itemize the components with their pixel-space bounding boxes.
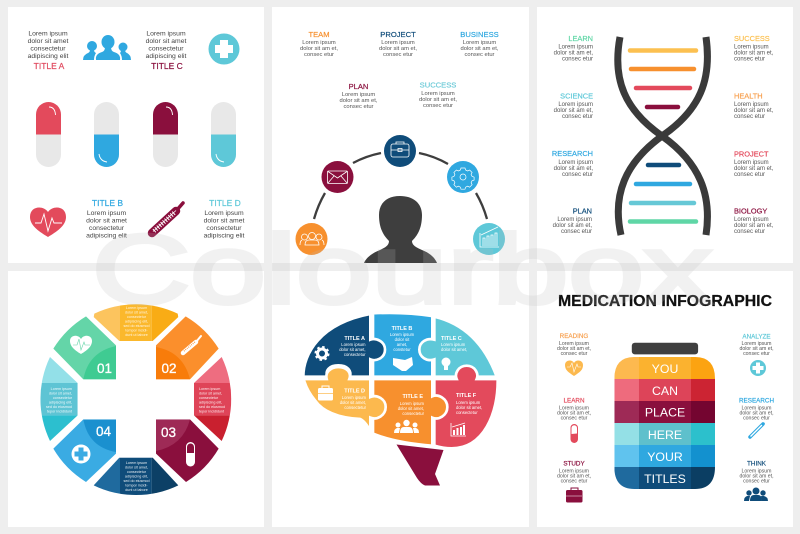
text block: biology: dolor sit am et, bbox=[734, 223, 774, 229]
label: title E: dolor sit amet, bbox=[398, 406, 424, 411]
ring text: yellow bbox=[123, 306, 150, 337]
text block: science: SCIENCE bbox=[560, 92, 593, 100]
text block: study: Lorem ipsum bbox=[559, 468, 589, 474]
brain pieces bbox=[303, 313, 498, 448]
text block: title B: TITLE B bbox=[92, 198, 123, 208]
jar bands bbox=[614, 357, 715, 489]
panel: pills bbox=[8, 7, 264, 263]
text block: plan: dolor sit am et, bbox=[553, 223, 592, 229]
text block: success: dolor sit am et, bbox=[734, 50, 774, 56]
brain stem bbox=[396, 444, 444, 486]
text block: title B: Lorem ipsum bbox=[87, 210, 126, 217]
icon: people blue bbox=[744, 488, 768, 501]
icon: chart circle bbox=[473, 223, 505, 255]
text block: think: consec etur bbox=[743, 478, 770, 484]
text block: research: RESEARCH bbox=[739, 398, 774, 404]
icon: heart bbox=[30, 208, 66, 237]
label: title A: dolor sit amet, bbox=[339, 347, 366, 352]
text block: research: Lorem ipsum bbox=[558, 160, 593, 166]
text block: business: BUSINESS bbox=[460, 30, 499, 39]
text block: title C: consectetur bbox=[148, 46, 184, 52]
text block: science: consec etur bbox=[562, 114, 593, 120]
text block: think: dolor sit am et, bbox=[739, 474, 774, 480]
text block: research: consec etur bbox=[743, 415, 770, 421]
ring text: dark blue: dolor sit amet, bbox=[125, 466, 148, 470]
text block: research: consec etur bbox=[562, 172, 593, 178]
text block: learn: consec etur bbox=[562, 56, 593, 62]
ring text: teal: sed do eiusmod bbox=[46, 405, 72, 409]
text block: biology: consec etur bbox=[734, 229, 765, 235]
text block: reading bbox=[557, 333, 591, 357]
icon: heart orange bbox=[565, 361, 583, 376]
text block: health: consec etur bbox=[734, 114, 765, 120]
text block: business: consec etur bbox=[465, 52, 495, 58]
text block: project: Lorem ipsum bbox=[381, 40, 415, 46]
text block: project bbox=[734, 150, 774, 178]
ring text: yellow: Lorem ipsum bbox=[126, 306, 147, 310]
number 03: 03 bbox=[161, 425, 176, 440]
text block: title C: dolor sit amet bbox=[146, 38, 187, 45]
text block: success bbox=[734, 34, 774, 62]
text block: project: dolor sit am et, bbox=[379, 46, 417, 52]
text block: success: SUCCESS bbox=[420, 80, 456, 90]
text block: project bbox=[379, 30, 417, 58]
piece C bbox=[419, 317, 497, 377]
ring text: teal: dolor sit amet, bbox=[49, 392, 72, 396]
piece A bbox=[303, 314, 385, 377]
text block: plan: dolor sit am et, bbox=[339, 98, 378, 104]
label: title D: TITLE D bbox=[344, 388, 365, 394]
DNA rungs bbox=[630, 50, 696, 222]
text block: team: TEAM bbox=[308, 30, 330, 39]
text block: learn bbox=[554, 34, 593, 62]
label: title B: TITLE B bbox=[392, 326, 412, 332]
text block: project: consec etur bbox=[734, 172, 765, 178]
label: title B: amet, bbox=[397, 342, 407, 347]
icon: briefcase maroon bbox=[566, 488, 582, 502]
ring text: yellow: consectetur bbox=[127, 315, 147, 319]
label: title A bbox=[339, 336, 366, 357]
segment: 01 green bbox=[54, 316, 116, 380]
ring text: dark blue: dunt ut labore bbox=[125, 488, 148, 492]
text block: project: Lorem ipsum bbox=[734, 160, 769, 166]
ring text: teal: Lorem ipsum bbox=[51, 387, 72, 391]
piece D bbox=[304, 367, 386, 431]
text block: title B: consectetur bbox=[89, 225, 125, 232]
ring text: red: adipiscing elit, bbox=[199, 400, 222, 404]
text block: biology bbox=[734, 206, 774, 235]
text block: plan bbox=[553, 206, 592, 235]
icon: mail circle bbox=[322, 161, 354, 193]
ring text: dark blue bbox=[123, 461, 150, 492]
text block: learn: LEARN bbox=[568, 34, 593, 43]
text block: health: dolor sit am et, bbox=[734, 108, 774, 114]
label: title E: TITLE E bbox=[403, 394, 423, 400]
text block: title D: Lorem ipsum bbox=[204, 210, 244, 217]
icon: people bbox=[83, 35, 131, 60]
text block: project: consec etur bbox=[383, 52, 413, 58]
panel: medication jar bbox=[537, 271, 793, 527]
jar labels: HERE bbox=[648, 428, 682, 442]
text block: study: consec etur bbox=[561, 478, 588, 484]
jar bbox=[614, 343, 715, 489]
jar labels: YOU bbox=[652, 362, 678, 376]
icon: people bbox=[394, 420, 419, 433]
text block: reading: Lorem ipsum bbox=[559, 341, 589, 347]
ring segments bbox=[37, 297, 235, 499]
person silhouette bbox=[364, 196, 437, 263]
text block: title A: consectetur bbox=[30, 46, 66, 52]
icon: medical plus bbox=[208, 34, 240, 64]
icon: lightbulb bbox=[442, 358, 450, 370]
ring text: red bbox=[199, 387, 225, 414]
label: title E: Lorem ipsum bbox=[400, 401, 425, 406]
icon: plus white bbox=[72, 444, 90, 464]
text block: team bbox=[300, 30, 338, 58]
ring text: yellow: dunt ut labore bbox=[125, 333, 148, 337]
panel: cross ring bbox=[8, 271, 264, 527]
jar labels: TITLES bbox=[644, 472, 686, 486]
text block: research: RESEARCH bbox=[552, 149, 593, 158]
text block: title A: dolor sit amet bbox=[28, 38, 69, 45]
text block: title D: consectetur bbox=[206, 225, 242, 232]
ring text: red: consectetur bbox=[199, 396, 219, 400]
label: title E bbox=[398, 394, 425, 416]
ring text: yellow: tempor incidi- bbox=[125, 328, 148, 332]
ring text: red: dolor sit amet, bbox=[199, 392, 222, 396]
ring text: teal bbox=[46, 387, 73, 414]
icon: heart white bbox=[70, 336, 92, 354]
ring text: yellow: adipiscing elit, bbox=[125, 320, 148, 324]
number 02: 02 bbox=[161, 361, 177, 376]
pill: teal bbox=[211, 102, 236, 167]
text block: learn: Lorem ipsum bbox=[559, 405, 589, 411]
text block: plan: Lorem ipsum bbox=[342, 92, 375, 98]
text block: learn bbox=[557, 398, 591, 421]
text block: success bbox=[419, 80, 457, 109]
segment: 03 maroon bbox=[156, 419, 219, 482]
text block: biology: Lorem ipsum bbox=[734, 217, 769, 223]
ring text: teal: consectetur bbox=[53, 396, 73, 400]
label: title C bbox=[441, 336, 467, 352]
text block: analyze: consec etur bbox=[743, 351, 770, 357]
label: title B: Lorem ipsum bbox=[390, 332, 415, 337]
panel: DNA bbox=[537, 7, 793, 263]
text block: reading: dolor sit am et, bbox=[557, 346, 591, 352]
text block: learn: dolor sit am et, bbox=[554, 50, 593, 56]
piece B bbox=[373, 313, 432, 377]
text block: science: Lorem ipsum bbox=[558, 102, 593, 108]
text block: health: HEALTH bbox=[734, 92, 763, 100]
jar labels: CAN bbox=[652, 384, 678, 398]
icon: briefcase bbox=[318, 386, 333, 400]
label: title B: constetur bbox=[393, 347, 411, 352]
icon: bar chart bbox=[451, 423, 466, 436]
icon: pill white bbox=[186, 442, 195, 466]
text block: title A bbox=[28, 30, 69, 71]
label: title F: dolor sit amet, bbox=[456, 405, 482, 410]
label: title A: TITLE A bbox=[344, 336, 365, 342]
segment: 04 blue bbox=[54, 419, 116, 482]
text block: title D: adipiscing elit bbox=[204, 232, 245, 240]
label: title D: Lorem ipsum bbox=[342, 395, 367, 400]
text block: science bbox=[554, 92, 593, 120]
ring text: red: Lorem ipsum bbox=[199, 387, 220, 391]
text block: research: dolor sit am et, bbox=[739, 410, 774, 416]
ring text: dark blue: adipiscing elit, bbox=[125, 474, 148, 478]
icon: handshake bbox=[393, 357, 413, 371]
text block: success: consec etur bbox=[734, 56, 765, 62]
icon: thermometer white bbox=[183, 336, 201, 353]
text block: learn: Lorem ipsum bbox=[558, 44, 593, 50]
text block: title C: adipiscing elit bbox=[146, 53, 187, 60]
text block: plan: PLAN bbox=[573, 206, 592, 216]
text block: health bbox=[734, 92, 774, 120]
label: title F bbox=[456, 393, 482, 415]
ring text: dark blue: Lorem ipsum bbox=[126, 461, 147, 465]
label: title F: Lorem ipsum bbox=[456, 400, 481, 405]
text block: title D: TITLE D bbox=[209, 198, 241, 208]
ring text: yellow: dolor sit amet, bbox=[125, 310, 148, 314]
text block: research: Lorem ipsum bbox=[742, 405, 771, 411]
text block: title B bbox=[86, 198, 127, 240]
segment: 02 orange bbox=[156, 316, 218, 380]
text block: analyze bbox=[739, 334, 774, 357]
segment: dark blue text bbox=[94, 458, 178, 495]
text block: learn: consec etur bbox=[561, 415, 588, 421]
label: title B bbox=[390, 326, 415, 352]
segment: red text bbox=[194, 357, 232, 441]
text block: success: dolor sit am et, bbox=[419, 97, 457, 103]
ring text: dark blue: tempor incidi- bbox=[125, 484, 148, 488]
text block: title A: adipiscing elit bbox=[28, 53, 69, 60]
pill: blue bbox=[94, 102, 119, 167]
arc connectors bbox=[314, 153, 487, 219]
number 01: 01 bbox=[97, 361, 112, 376]
text block: analyze: Lorem ipsum bbox=[742, 341, 771, 347]
text block: reading: READING bbox=[560, 333, 588, 340]
label: title E: consectetur bbox=[402, 411, 425, 416]
text block: title B: adipiscing elit bbox=[86, 232, 127, 240]
text block: success: Lorem ipsum bbox=[734, 44, 769, 50]
label: title C: Lorem ipsum bbox=[441, 342, 466, 347]
text block: plan: Lorem ipsum bbox=[557, 217, 592, 223]
number 04: 04 bbox=[96, 424, 111, 439]
title: MEDICATION INFOGRAPHIC bbox=[558, 293, 772, 310]
text block: title A: Lorem ipsum bbox=[28, 30, 68, 38]
text block: learn: dolor sit am et, bbox=[557, 410, 591, 416]
ring text: yellow: sed do eiusmod bbox=[123, 324, 150, 328]
text block: project: dolor sit am et, bbox=[734, 166, 774, 172]
piece E bbox=[373, 379, 447, 446]
text block: success: consec etur bbox=[423, 103, 453, 109]
pill: red bbox=[36, 102, 61, 167]
text block: think: THINK bbox=[747, 460, 767, 468]
panel: person arc bbox=[272, 7, 529, 263]
label: title D: dolor sit amet, bbox=[340, 400, 366, 405]
jar labels bbox=[644, 362, 686, 486]
text block: plan bbox=[339, 82, 378, 110]
text block: learn: LEARN bbox=[564, 398, 585, 404]
label: title C: dolor sit amet, bbox=[441, 347, 467, 352]
ring text: teal: tepor incididunt bbox=[47, 410, 72, 414]
ring text: dark blue: consectetur bbox=[127, 470, 147, 474]
segment: teal text bbox=[40, 357, 78, 441]
label: title C: TITLE C bbox=[441, 336, 462, 342]
text block: research bbox=[552, 149, 593, 178]
text block: study bbox=[557, 460, 591, 484]
text block: research bbox=[739, 398, 774, 421]
ring text: red: tepor incididunt bbox=[199, 410, 224, 414]
text block: study: STUDY bbox=[563, 460, 585, 468]
text block: think bbox=[739, 460, 774, 484]
text block: business bbox=[460, 30, 499, 58]
text block: plan: consec etur bbox=[344, 104, 374, 110]
icon: thermometer blue bbox=[750, 423, 764, 437]
text block: success: SUCCESS bbox=[734, 34, 770, 43]
text block: research: dolor sit am et, bbox=[554, 166, 593, 172]
icon: thermometer bbox=[152, 203, 183, 233]
icon: pill red bbox=[570, 424, 578, 443]
text block: business: dolor sit am et, bbox=[460, 46, 499, 52]
label: title F: consectetur bbox=[456, 410, 478, 415]
text block: analyze: ANALYZE bbox=[742, 334, 771, 340]
text block: analyze: dolor sit am et, bbox=[739, 346, 774, 352]
icon: gear circle bbox=[447, 161, 479, 193]
label: title D bbox=[340, 388, 367, 410]
text block: success: Lorem ipsum bbox=[421, 91, 455, 97]
label: title A: consectetur bbox=[344, 352, 366, 357]
ring text: dark blue: sed do eiusmod bbox=[123, 479, 150, 483]
jar lid bbox=[632, 343, 698, 354]
icon: gear bbox=[316, 347, 328, 360]
text block: think: Lorem ipsum bbox=[742, 468, 771, 474]
text block: title D bbox=[204, 198, 245, 240]
icon: plus teal bbox=[750, 360, 766, 376]
jar labels: YOUR bbox=[647, 450, 683, 464]
text block: title C: TITLE C bbox=[151, 61, 183, 71]
icon: team circle bbox=[296, 223, 328, 255]
label: title D: consectetur bbox=[344, 405, 367, 410]
text block: title C bbox=[146, 30, 187, 71]
text block: biology: BIOLOGY bbox=[734, 206, 767, 216]
piece F bbox=[434, 366, 498, 448]
text block: business: Lorem ipsum bbox=[463, 40, 496, 46]
label: title B: dolor sit bbox=[395, 337, 410, 342]
text block: plan: consec etur bbox=[561, 229, 592, 235]
text block: team: dolor sit am et, bbox=[300, 46, 338, 52]
text block: health: Lorem ipsum bbox=[734, 102, 769, 108]
DNA strands bbox=[618, 37, 707, 235]
text block: project: PROJECT bbox=[734, 150, 769, 158]
text block: title D: dolor sit amet bbox=[204, 218, 245, 224]
icon: briefcase circle bbox=[384, 135, 416, 167]
text block: title B: dolor sit amet bbox=[86, 218, 127, 224]
text block: title C: Lorem ipsum bbox=[146, 30, 186, 38]
text block: team: Lorem ipsum bbox=[302, 40, 336, 46]
text block: reading: consec etur bbox=[561, 351, 588, 357]
pill: maroon bbox=[153, 102, 178, 167]
watermark: Colourbox bbox=[92, 214, 712, 324]
text block: project: PROJECT bbox=[380, 30, 416, 39]
segment: yellow text bbox=[94, 304, 178, 341]
label: title A: Lorem ipsum bbox=[341, 342, 366, 347]
jar labels: PLACE bbox=[645, 406, 685, 420]
text block: plan: PLAN bbox=[349, 82, 368, 91]
ring text: red: sed do eiusmod bbox=[199, 405, 225, 409]
text block: title A: TITLE A bbox=[34, 61, 65, 71]
text block: study: dolor sit am et, bbox=[557, 474, 591, 480]
label: title F: TITLE F bbox=[456, 393, 477, 399]
panel: brain puzzle bbox=[272, 271, 529, 527]
ring text: teal: adipiscing elit, bbox=[49, 400, 72, 404]
text block: science: dolor sit am et, bbox=[554, 108, 593, 114]
text block: team: consec etur bbox=[304, 52, 334, 58]
